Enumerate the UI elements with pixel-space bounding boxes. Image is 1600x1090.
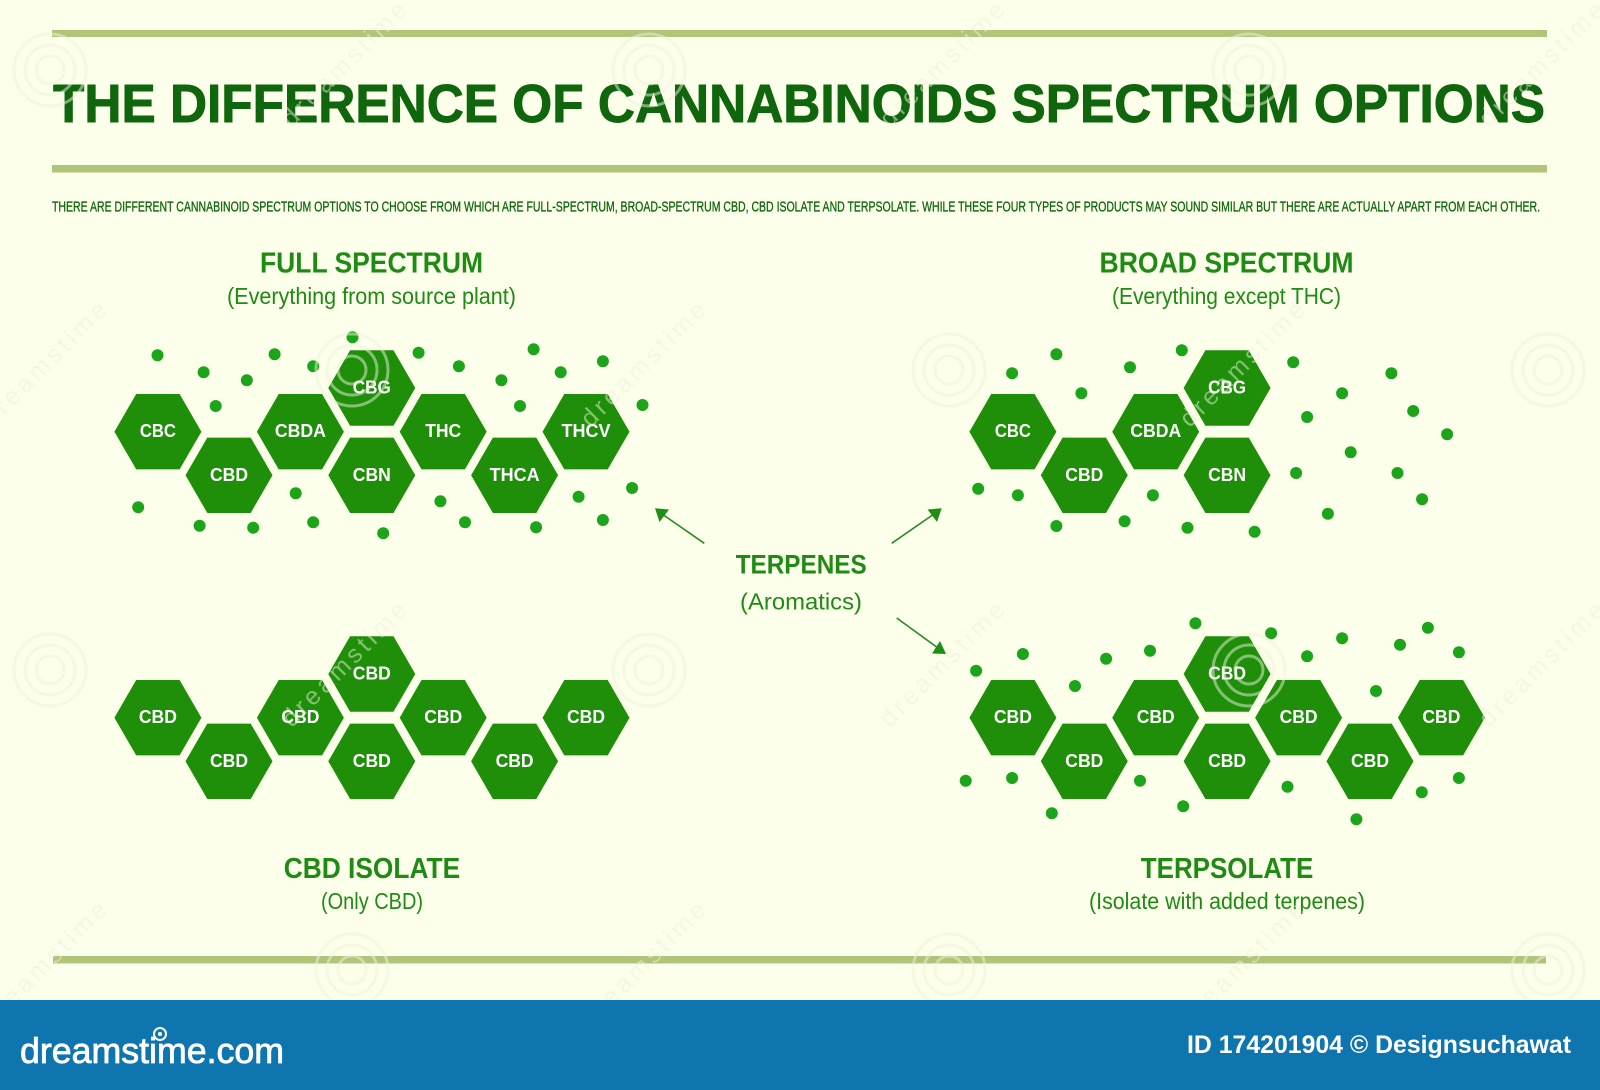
hexagon: CBD: CBD [1208, 662, 1246, 684]
hexagon: CBN [1184, 438, 1271, 513]
hexagon: CBD: CBD [281, 706, 319, 727]
hexagon: CBD [1184, 636, 1271, 712]
terpene dots: terpsolate [960, 617, 1465, 825]
hexagon: CBC [969, 394, 1056, 469]
hexagon: CBD: CBD [353, 750, 391, 771]
title: THE DIFFERENCE OF CANNABINOIDS SPECTRUM OPTIONS [53, 74, 1545, 134]
hexagon: CBN: CBN [1208, 464, 1246, 485]
footer image id and credit: ID 174201904 © Designsuchawat [1187, 1031, 1572, 1059]
hexagon: CBC: CBC [140, 420, 176, 441]
watermark diagonal text: dreamstime [874, 596, 1011, 733]
subheading: aromatics: (Aromatics) [740, 589, 862, 615]
panel: terpenes callout with arrows [655, 508, 946, 654]
subheading: isolate with added terpenes: (Isolate with added terpenes) [1089, 888, 1365, 914]
hexagon: CBC: CBC [995, 420, 1031, 441]
hexagon: CBD: CBD [1137, 706, 1175, 727]
hexagon: CBD [471, 724, 558, 799]
hexagon: CBD: CBD [353, 662, 391, 684]
hexagon: CBD: CBD [1208, 750, 1246, 771]
hexagon: CBD: CBD [210, 750, 248, 771]
panel: CBD isolate [114, 636, 629, 914]
hexagon: CBG: CBG [1208, 376, 1246, 398]
heading: terpsolate: TERPSOLATE [1141, 853, 1313, 885]
hexagon: THC [400, 394, 487, 469]
hexagon: CBD [257, 680, 344, 755]
bottom divider [53, 956, 1546, 964]
hexagon: CBDA: CBDA [275, 420, 326, 441]
hexagon: CBD [1041, 438, 1128, 513]
hexagon: THC: THC [425, 420, 461, 441]
hexagon: CBD [114, 680, 201, 755]
hexagon: CBDA [257, 394, 344, 469]
watermark diagonal text: dreamstime [874, 0, 1011, 133]
panel: full spectrum [114, 248, 648, 539]
arrow: to full spectrum [655, 508, 704, 543]
heading: full spectrum: FULL SPECTRUM [260, 248, 483, 280]
hexagon: CBD: CBD [567, 706, 605, 727]
hexagon: CBD: CBD [1351, 750, 1389, 771]
hexagon: THCA [471, 438, 558, 513]
hexagon: CBD: CBD [1280, 706, 1318, 727]
hexagon: CBD [1041, 724, 1128, 799]
hexagon: CBG: CBG [353, 376, 391, 398]
panel: broad spectrum [969, 248, 1453, 538]
hexagon: CBD [186, 438, 272, 513]
hexagon: CBD [1184, 724, 1271, 799]
subheading: only CBD: (Only CBD) [321, 888, 423, 914]
hexagon: CBD [328, 724, 415, 799]
hexagon: CBD [969, 680, 1056, 755]
hexagon: THCA: THCA [490, 464, 540, 485]
terpene dots: full spectrum [132, 331, 648, 539]
heading: terpenes: TERPENES [736, 550, 867, 580]
heading: CBD isolate: CBD ISOLATE [284, 853, 460, 885]
subheading: broad spectrum: (Everything except THC) [1112, 283, 1341, 309]
hexagon: CBG [1184, 350, 1271, 426]
terpene dots: broad spectrum [972, 344, 1453, 538]
hexagon: CBD [1255, 680, 1342, 755]
watermark diagonal text: dreamstime [1174, 896, 1311, 1033]
heading: broad spectrum: BROAD SPECTRUM [1100, 248, 1354, 280]
panel: terpsolate [960, 617, 1485, 914]
hexagon: CBD [400, 680, 487, 755]
hexagon: CBD: CBD [210, 464, 248, 485]
hexagon: CBD: CBD [424, 706, 462, 727]
hexagon: CBD [186, 724, 272, 799]
hexagon: CBC [114, 394, 201, 469]
watermark diagonal text: dreamstime [575, 896, 712, 1033]
title block [52, 30, 1547, 172]
subheading: full spectrum: (Everything from source plant) [227, 283, 516, 309]
footer bar [0, 1000, 1600, 1090]
arrow: to broad spectrum [892, 508, 942, 543]
hexagon: CBD: CBD [1065, 464, 1103, 485]
hexagon: CBD: CBD [139, 706, 177, 727]
hexagon: CBG [328, 350, 415, 426]
hexagon: CBD: CBD [1065, 750, 1103, 771]
hexagon: CBD [1326, 724, 1414, 799]
watermark diagonal text: dreamstime [1174, 296, 1311, 433]
hexagon: CBD [328, 636, 415, 712]
arrow: to terpsolate [897, 618, 946, 654]
hexagon: CBN [328, 438, 415, 513]
watermark diagonal text: dreamstime [276, 596, 413, 733]
hexagon: THCV [542, 394, 630, 469]
hexagon: CBN: CBN [353, 464, 391, 485]
watermark diagonal text: dreamstime [575, 296, 712, 433]
watermark diagonal text: dreamstime [276, 0, 413, 133]
hexagon: CBD [542, 680, 630, 755]
hexagon: CBDA [1112, 394, 1199, 469]
hexagon: CBD: CBD [496, 750, 534, 771]
footer logo: dreamstime.com: dreamstime.com [20, 1030, 284, 1071]
hexagon: CBD [1112, 680, 1199, 755]
hexagon: CBD: CBD [1422, 706, 1460, 727]
hexagon: THCV: THCV [562, 420, 611, 441]
hexagon: CBD [1398, 680, 1485, 755]
hexagon: CBDA: CBDA [1130, 420, 1181, 441]
hexagon: CBD: CBD [994, 706, 1032, 727]
